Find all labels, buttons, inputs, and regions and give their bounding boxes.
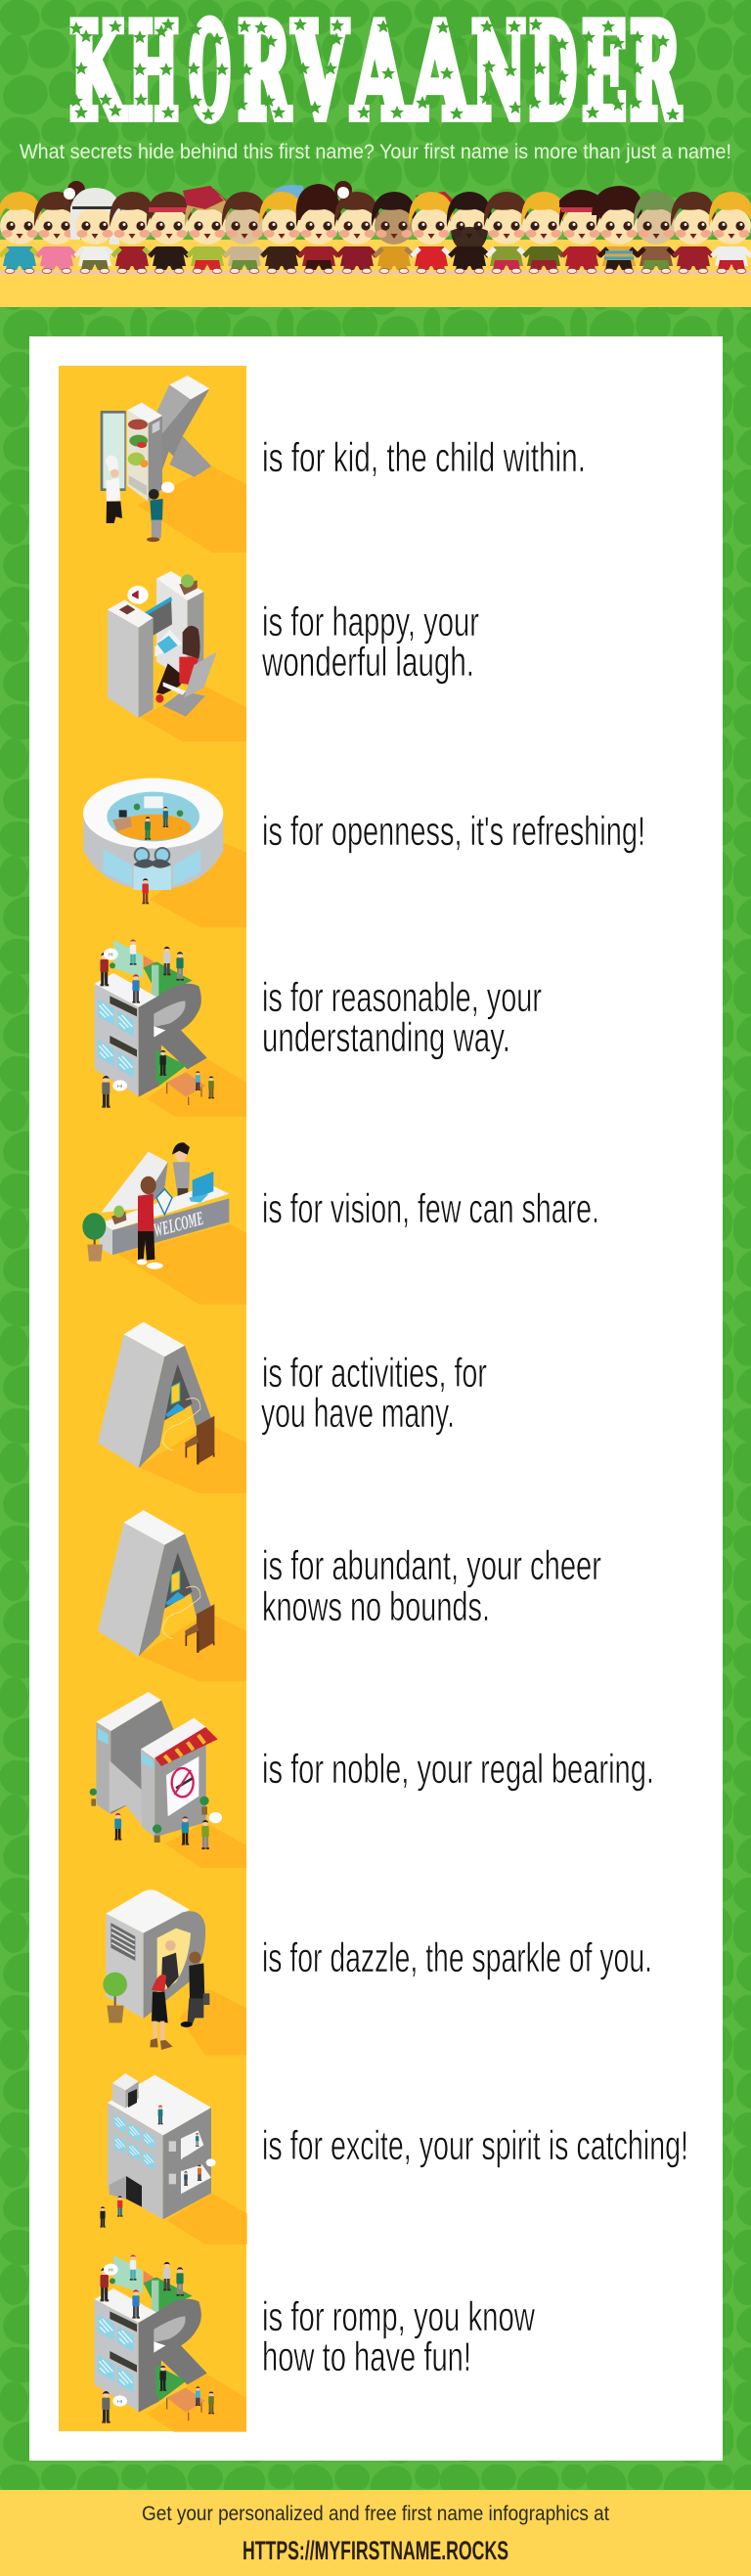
line R [262,974,542,1060]
child 1 [0,192,42,274]
plant [179,580,198,595]
WELCOME sign: WELCOME [152,1208,205,1242]
plants [90,1789,97,1796]
letter lines [261,434,688,2379]
roof [95,973,156,1007]
line A: is for activities, for [262,1350,487,1396]
line R2 [262,2293,535,2379]
line A2: knows no bounds. [262,1583,490,1629]
illustration: letter O optician ring [83,778,246,927]
people [100,953,109,986]
customer [147,489,163,542]
customer [137,1177,172,1269]
counter plant [111,1212,126,1224]
monitor [193,1172,213,1200]
desk [155,629,183,657]
inner well [107,792,199,841]
yellow illustration column [59,366,246,2431]
line A [261,1350,487,1436]
child 4 [110,192,155,274]
man with briefcase [181,1952,209,2027]
child 11 [372,192,417,274]
grille [110,1923,135,1961]
desk [166,1073,205,1097]
roof box [112,2073,139,2109]
counter front [112,1198,229,1255]
ring side [83,815,223,890]
windows [104,849,132,886]
illustration: letter D with people [103,1889,246,2056]
row of cartoon children [0,181,751,275]
speech bubble [209,1812,222,1823]
line H: wonderful laugh. [261,639,474,685]
child 5 with band [147,192,192,274]
roof [108,2075,211,2135]
rooftop glass and lawn [113,940,143,978]
illustration: letter R office building: HI [117,1084,122,1089]
counter top [101,1184,229,1230]
top [124,1322,185,1356]
line A2 [262,1542,601,1629]
windows [98,999,114,1025]
shadow [147,1058,246,1117]
chair [163,691,205,717]
line K: is for kid, the child within. [262,434,586,480]
child 8 with blue hat [259,185,305,274]
shadow [137,466,246,553]
left wall [95,984,139,1096]
illustration: letter V welcome desk [82,1142,246,1305]
peach ground strip [0,271,751,275]
stars on the title letters [69,18,680,120]
illustration: letter N shop [90,1692,246,1868]
illustration: second letter R [95,2255,246,2432]
front column [108,609,139,718]
people [114,1813,121,1841]
white content panel [29,336,723,2461]
illustration: letter H with woman at computer [108,571,246,741]
right wall [163,2108,211,2219]
child 2 with flower [34,181,85,274]
shadow [164,1822,246,1868]
child 12 with red hat [409,192,455,274]
no smoking sign [166,1756,199,1816]
top [106,1889,190,1933]
awning [155,1727,218,1766]
illustration: letter R office building: HI [109,953,113,958]
shadow [117,1223,246,1305]
illustration: letter R office building [95,940,246,1117]
diagonal [110,1760,144,1827]
child 19 [671,192,716,274]
K arm [156,384,191,460]
shadow [140,685,246,741]
illustration: second letter A [98,1510,246,1681]
line R: understanding way. [262,1014,510,1060]
line A: you have many. [261,1390,455,1436]
child 9 with tall dark hair [296,184,341,274]
R front [139,984,207,1097]
line H: is for happy, your [262,599,479,644]
screen and laptop [171,1382,180,1404]
child 17 in striped shirt [592,186,642,274]
balcony people [196,2133,199,2147]
door and stoop [110,2176,126,2198]
footer band [0,2490,751,2576]
HI bubbles [104,949,118,960]
moustache [134,859,171,868]
line R2: how to have fun! [262,2333,471,2379]
potted tree [82,1213,106,1262]
child 10 with flower [334,181,379,274]
line A2: is for abundant, your cheer [262,1542,601,1588]
speech bubble [161,482,174,493]
man in doorway [161,1940,179,1988]
child 3 with headscarf [70,188,120,274]
speaker bubble [127,586,149,604]
illustration: letter A with chair [98,1322,246,1493]
left stem [96,1722,110,1814]
child 16 with band [559,190,604,274]
fridge contents [128,420,148,429]
footer url: HTTPS://MYFIRSTNAME.ROCKS [243,2536,508,2565]
child 7 [222,192,267,274]
shadow [179,1988,246,2056]
left face [98,1334,164,1468]
balconies [181,2130,203,2159]
line H [261,599,479,685]
child 13 with beard [447,192,492,274]
chair [185,1416,214,1464]
child 15 [521,192,566,274]
windows [114,2114,126,2133]
woman [150,1975,173,2050]
left face [106,1914,144,2019]
inner people and plants [134,804,140,810]
ring top [83,778,223,849]
line V: is for vision, few can share. [262,1185,599,1231]
fridge body [127,410,149,502]
illustration: letter K with fridge [101,376,246,553]
child 6 with red hat [183,186,230,274]
child 20 [709,192,751,274]
receptionist [172,1142,190,1196]
shadow [166,2194,247,2244]
child 14 [484,192,529,274]
cables [163,1399,200,1450]
header yellow band [0,240,751,307]
monitor [144,598,172,641]
line R: is for reasonable, your [262,974,542,1020]
back column [156,579,188,682]
signs [110,996,137,1016]
person walking [142,878,149,904]
tree [103,1973,127,2022]
left wall [108,2103,163,2219]
front face [144,1911,205,2019]
chef [106,456,122,523]
line R2: is for romp, you know [262,2293,535,2339]
windows [98,1728,109,1745]
shadow [150,843,246,927]
shadow [139,1424,246,1493]
footer text: Get your personalized and free first name infographics at [142,2503,609,2525]
triangle back [101,1152,168,1213]
front face [139,1346,211,1468]
title: KHORVAANDER [69,0,682,149]
child 18 with green cap [634,192,679,274]
woman [155,626,200,703]
glasses [135,848,169,863]
illustration: letter E building [100,2073,247,2244]
people [158,2106,163,2124]
right column [141,1749,155,1837]
fridge door [101,411,126,491]
